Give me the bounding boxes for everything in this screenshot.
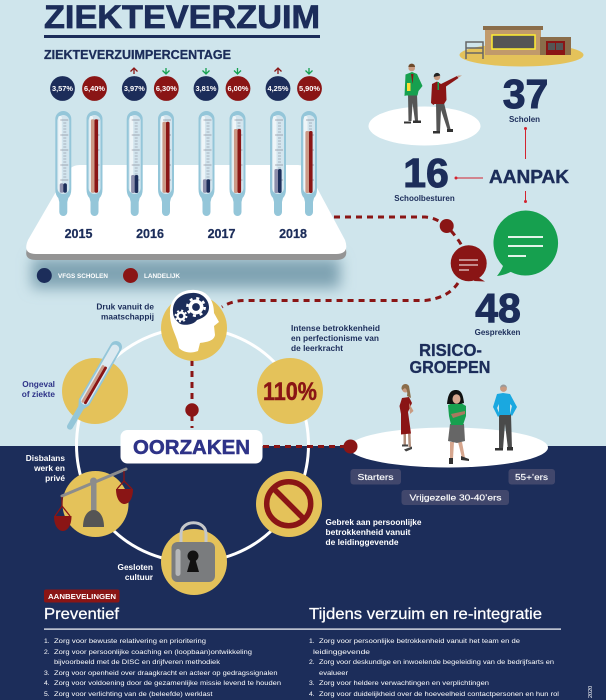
percentage badges: 6,40%	[84, 84, 105, 93]
heading: tijdens verzuim en re-integratie: Tijdens verzuim en re-integratie	[309, 606, 542, 623]
label: druk vanuit de maatschappij	[96, 302, 154, 322]
dashed connector to causes	[222, 283, 458, 307]
list: preventief: Zorg voor verlichting van de (beleefde) werklast	[54, 691, 213, 698]
label: disbalans werk en prive: Disbalans	[26, 453, 65, 463]
label: gesloten cultuur: cultuur	[125, 572, 154, 582]
green speech bubble	[493, 210, 558, 276]
percentage badges: 3,57%	[52, 84, 73, 93]
label: disbalans werk en prive	[26, 453, 65, 483]
label: ongeval of ziekte: Ongeval	[22, 379, 55, 389]
connector end dot	[344, 440, 358, 454]
percentage badges: 3,97%	[124, 84, 145, 93]
cause: head with gears	[161, 290, 227, 361]
2018 landelijk 5,90%	[301, 111, 317, 216]
label: gebrek aan persoonlijke betrokkenheid: Gebrek aan persoonlijke	[326, 517, 422, 527]
cause: padlock	[161, 523, 227, 595]
stat: 16 schoolbesturen	[394, 150, 455, 203]
white ring	[76, 328, 308, 562]
list: preventief: Zorg voor voldoening door de gezamenlijke missie levend te houden	[54, 680, 281, 687]
aanbevelingen tag	[44, 590, 120, 602]
2015 scholen 3,57%	[55, 111, 71, 216]
aanpak arrows	[455, 128, 526, 202]
oorzaken label	[120, 430, 262, 464]
list: preventief	[44, 638, 281, 698]
cause: 110%	[257, 358, 323, 424]
cause: 110%: 110%	[263, 378, 317, 406]
2016 landelijk 6,30%	[158, 111, 174, 216]
group label: vrijgezelle: Vrijgezelle 30-40’ers	[410, 492, 502, 502]
cause: scale	[54, 469, 133, 537]
group label: 55+: 55+’ers	[515, 472, 548, 482]
label: intense betrokkenheid: en perfectionisme van	[291, 333, 379, 343]
list: preventief: 2.	[44, 649, 50, 656]
trend arrows	[130, 68, 312, 74]
list: tijdens verzuim: Zorg voor heldere verwachtingen en verplichtingen	[319, 680, 489, 687]
heading: ziekteverzuimpercentage: ZIEKTEVERZUIMPERCENTAGE	[44, 47, 231, 62]
dot on vertical connector	[185, 403, 199, 417]
2017 landelijk 6,00%	[230, 111, 246, 216]
group label: starters: Starters	[358, 472, 394, 482]
year note: 2020	[588, 686, 594, 698]
list: tijdens verzuim: Zorg voor persoonlijke betrokkenheid vanuit het team en de	[319, 638, 520, 645]
label: disbalans werk en prive: werk en	[33, 463, 65, 473]
woman in green top	[447, 390, 469, 464]
heading: risicogroepen: GROEPEN	[410, 357, 490, 377]
percentage badges: 3,81%	[196, 84, 217, 93]
label: gebrek aan persoonlijke betrokkenheid	[326, 517, 422, 547]
dashed connector from platform to speech bubbles	[334, 217, 463, 248]
platform shadow	[32, 258, 340, 288]
label: gesloten cultuur: Gesloten	[117, 562, 153, 572]
list: preventief: bijvoorbeeld met de DISC en drijfveren methodiek	[54, 659, 221, 666]
legend: LANDELIJK	[144, 273, 181, 280]
oorzaken label: OORZAKEN	[133, 437, 250, 459]
list: tijdens verzuim	[309, 638, 560, 698]
white ellipse with two men	[368, 64, 480, 146]
percentage badges: 4,25%	[268, 84, 289, 93]
list: tijdens verzuim: 4.	[309, 691, 315, 698]
stat: 16 schoolbesturen: Schoolbesturen	[394, 194, 455, 203]
title: ZIEKTEVERZUIM	[44, 0, 320, 35]
2017 scholen 3,81%	[198, 111, 214, 216]
heading: risicogroepen: RISICO-	[419, 340, 482, 360]
heading: risicogroepen	[410, 340, 490, 377]
list: tijdens verzuim: 2.	[309, 659, 315, 666]
connector dot	[440, 219, 454, 233]
label: intense betrokkenheid: Intense betrokkenheid	[291, 323, 380, 333]
man in red jacket pointing	[431, 73, 462, 134]
stat: 48 gesprekken: Gesprekken	[475, 328, 521, 337]
man in green jacket	[404, 64, 422, 124]
stat: 37 scholen: Scholen	[509, 115, 540, 124]
year labels: 2015	[65, 227, 92, 241]
year labels	[65, 227, 307, 241]
list: tijdens verzuim: 1.	[309, 638, 315, 645]
list: preventief: 5.	[44, 691, 50, 698]
woman in red dress	[400, 384, 414, 452]
label: gebrek aan persoonlijke betrokkenheid: betrokkenheid vanuit	[326, 527, 411, 537]
percentage badges: 6,30%	[156, 84, 177, 93]
cause: prohibition sign	[256, 471, 322, 537]
dashed connector oorzaken to risicogroepen	[263, 445, 345, 448]
heading: preventief: Preventief	[44, 606, 120, 623]
platform	[26, 165, 346, 260]
red speech bubble	[451, 245, 487, 282]
background: light upper area	[0, 0, 606, 446]
legend: VFGS SCHOLEN	[58, 273, 109, 280]
list: tijdens verzuim: Zorg voor deskundige en inwoelende begeleiding van de bedrijfsarts en	[319, 659, 554, 666]
background: navy lower area	[0, 446, 606, 700]
heading: aanpak: AANPAK	[489, 167, 569, 187]
risk groups ellipse with people	[349, 384, 548, 468]
label: intense betrokkenheid: de leerkracht	[291, 343, 343, 353]
group label: vrijgezelle	[402, 490, 509, 505]
stat: 48 gesprekken: 48	[475, 285, 521, 331]
label: gesloten cultuur	[117, 562, 154, 582]
label: druk vanuit de maatschappij: maatschappij	[101, 312, 154, 322]
list: tijdens verzuim: leidinggevende	[313, 649, 370, 656]
group label: starters	[350, 469, 401, 484]
label: gebrek aan persoonlijke betrokkenheid: de leidinggevende	[326, 537, 399, 547]
dashed connector top circle to oorzaken	[190, 360, 194, 428]
list: preventief: Zorg voor openheid over draagkracht en acteer op gedragssignalen	[54, 670, 278, 677]
list: tijdens verzuim: 3.	[309, 680, 315, 687]
school on yellow ellipse	[460, 26, 584, 66]
year labels: 2017	[208, 227, 235, 241]
label: ongeval of ziekte	[22, 379, 55, 399]
percentage badges: 5,90%	[299, 84, 320, 93]
group label: 55+	[508, 469, 555, 484]
percentage badges: 6,00%	[228, 84, 249, 93]
label: disbalans werk en prive: privé	[45, 473, 65, 483]
label: druk vanuit de maatschappij: Druk vanuit de	[96, 302, 154, 312]
year labels: 2016	[136, 227, 164, 241]
list: preventief: Zorg voor persoonlijke coaching en (loopbaan)ontwikkeling	[54, 649, 252, 656]
list: tijdens verzuim: evalueer	[319, 670, 349, 677]
percentage badges	[50, 76, 322, 101]
list: tijdens verzuim: Zorg voor duidelijkheid over de hoeveelheid contactpersonen en hun rol	[319, 691, 560, 698]
2015 landelijk 6,40%	[86, 111, 102, 216]
year labels: 2018	[279, 227, 307, 241]
label: ongeval of ziekte: of ziekte	[22, 389, 55, 399]
thermometer chart	[55, 111, 317, 216]
list: preventief: 1.	[44, 638, 50, 645]
2016 scholen 3,97%	[127, 111, 143, 216]
legend	[37, 268, 181, 283]
stat: 37 scholen: 37	[503, 71, 548, 117]
list: preventief: 3.	[44, 670, 50, 677]
aanbevelingen tag: AANBEVELINGEN	[48, 592, 116, 601]
label: intense betrokkenheid	[291, 323, 380, 353]
list: preventief: 4.	[44, 680, 50, 687]
man in blue sweater	[493, 384, 517, 450]
cause: thermometer	[62, 339, 128, 432]
stat: 16 schoolbesturen: 16	[403, 150, 449, 196]
2018 scholen 4,25%	[270, 111, 286, 216]
list: preventief: Zorg voor bewuste relativering en prioritering	[54, 638, 206, 645]
